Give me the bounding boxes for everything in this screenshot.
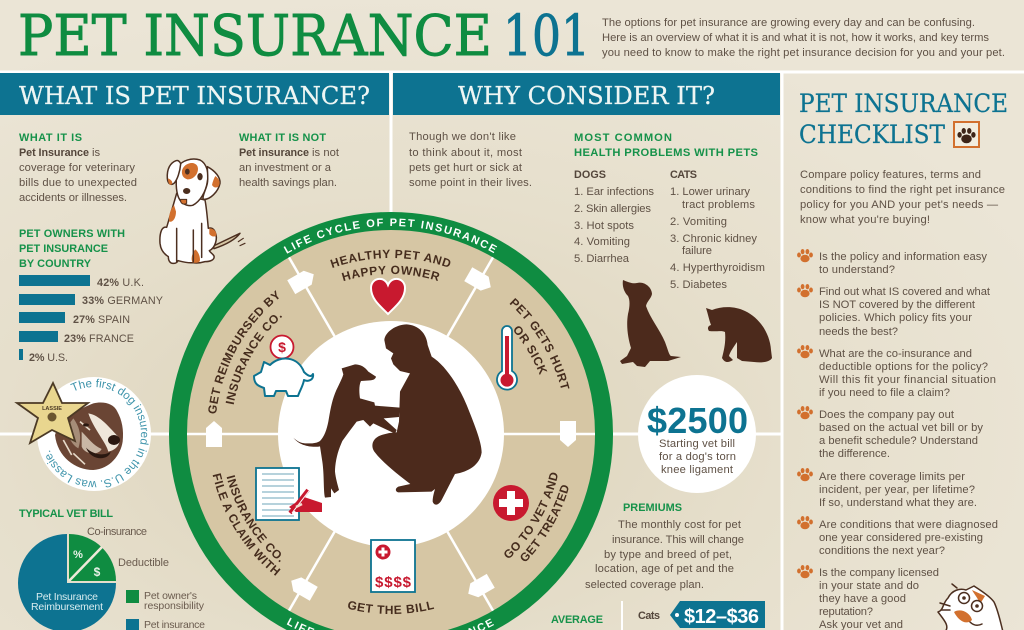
average premium: AVERAGE: [551, 614, 603, 626]
checklist item 6: [797, 516, 998, 557]
checklist item 7: Is the company licensed: [819, 567, 939, 579]
text block: why consider: [409, 131, 532, 189]
icon: bill: $$$$: [375, 574, 412, 591]
text block: what it is not: is not: [312, 147, 340, 159]
header: why consider it: [393, 73, 780, 115]
checklist item 3: Will this fit your financial situation: [819, 374, 996, 386]
checklist item 6: conditions the next year?: [819, 545, 945, 557]
legend: typical vet bill: Pet owner's: [144, 590, 197, 602]
heading: common health problems: [574, 132, 759, 159]
checklist item 3: What are the co-insurance and: [819, 348, 972, 360]
list: cats: 3. Chronic kidney: [670, 233, 757, 245]
intro text: Here is an overview of what it is and what it is not, how it works, and key terms: [602, 32, 989, 44]
callout: lassie: The first dog insured in the U.S. was Lassie.: [46, 378, 149, 488]
text block: premiums: PREMIUMS: [623, 502, 682, 514]
stage: go to vet: GET TREATED: [520, 485, 568, 562]
checklist item 4: Does the company pay out: [819, 409, 955, 421]
list: cats: 1. Lower urinary: [670, 186, 750, 198]
checklist item 6: Are conditions that were diagnosed: [819, 519, 998, 531]
text block: why consider: some point in their lives.: [409, 177, 532, 189]
icon: piggy bank and coin: [254, 336, 313, 396]
checklist item 2: [797, 284, 991, 338]
text block: checklist intro: Compare policy features, terms and: [800, 169, 981, 181]
heading: typical vet bill: TYPICAL VET BILL: [19, 508, 113, 520]
text block: pet owners heading: PET INSURANCE: [19, 243, 108, 255]
stage: get the bill: GET THE BILL: [348, 601, 434, 614]
stage: go to vet: GO TO VET AND: [504, 472, 558, 558]
text block: what it is: accidents or illnesses.: [19, 192, 127, 204]
arrows between stages: [206, 267, 576, 601]
text block: why consider: to think about it, most: [409, 147, 523, 159]
list: cats: 2. Vomiting: [670, 216, 727, 228]
icon: heart: [371, 279, 405, 314]
list: dogs: 1. Ear infections: [574, 186, 654, 198]
icon: paw badge: [954, 122, 979, 147]
checklist item 2: policies. Which policy fits your: [819, 312, 972, 324]
text block: premiums: selected coverage plan.: [585, 579, 704, 591]
text block: what it is: coverage for veterinary: [19, 162, 135, 174]
bar chart: pet owners by country: [19, 275, 163, 364]
stage: healthy pet: HAPPY OWNER: [342, 266, 440, 281]
text block: pet owners heading: BY COUNTRY: [19, 258, 92, 270]
text block: what it is not: [239, 132, 340, 189]
stage: healthy pet: [330, 250, 450, 281]
checklist item 4: the difference.: [819, 448, 890, 460]
text block: what it is not: WHAT IT IS NOT: [239, 132, 326, 144]
icon: bill: [371, 540, 415, 592]
legend: typical vet bill: [126, 590, 205, 630]
checklist item 5: Are there coverage limits per: [819, 471, 965, 483]
callout: vet bill: $2500: [647, 400, 748, 441]
text block: premiums: [585, 502, 744, 591]
list: cats: CATS: [670, 169, 697, 181]
pie chart: typical vet bill: [18, 526, 169, 630]
heading: checklist: [799, 89, 1008, 149]
icon: medical cross: [493, 485, 529, 521]
list: dogs: DOGS: [574, 169, 606, 181]
checklist item 6: one year considered pre-existing: [819, 532, 983, 544]
list: cats: tract problems: [682, 199, 755, 211]
white centre: [278, 321, 504, 547]
icon: cartoon cat with glasses: [938, 584, 1003, 630]
icon: dog silhouette: [620, 280, 681, 367]
stage: pet gets hurt: OR SICK: [514, 326, 548, 375]
list: cats: 5. Diabetes: [670, 279, 727, 291]
price tag: cats: [670, 601, 765, 628]
checklist item 4: [797, 406, 983, 460]
checklist item 2: IS NOT covered by the different: [819, 299, 976, 311]
callout: vet bill: knee ligament: [661, 464, 734, 476]
text block: premiums: The monthly cost for pet: [618, 519, 742, 531]
intro text: [602, 17, 1005, 59]
text block: premiums: by type and breed of pet,: [604, 549, 732, 561]
header: why consider it: WHY CONSIDER IT?: [458, 82, 715, 110]
checklist item 2: Find out what IS covered and what: [819, 286, 991, 298]
checklist item 4: a benefit schedule? Understand: [819, 435, 978, 447]
checklist item 3: if you need to file a claim?: [819, 387, 950, 399]
text block: checklist intro: know what you're buying!: [800, 214, 930, 226]
checklist item 5: [797, 468, 977, 509]
heading: checklist: PET INSURANCE: [799, 89, 1008, 118]
bar chart: pet owners by country: 2% U.S.: [29, 352, 68, 364]
icon: lassie portrait: [55, 402, 123, 470]
stage: file a claim: INSURANCE CO.: [226, 475, 281, 562]
owner silhouette: [372, 324, 482, 505]
title: PET INSURANCE: [18, 4, 492, 69]
pie chart: typical vet bill: Reimbursement: [31, 601, 103, 613]
callout: vet bill: [638, 375, 756, 493]
stage: healthy pet: HEALTHY PET AND: [330, 250, 450, 268]
bar chart: pet owners by country: 33% GERMANY: [82, 295, 163, 307]
checklist item 7: in your state and do: [819, 580, 919, 592]
list: dogs: 4. Vomiting: [574, 236, 630, 248]
checklist item 5: If so, understand what they are.: [819, 497, 977, 509]
segment dividers: [187, 257, 595, 611]
title: 101: [503, 4, 590, 69]
ring label top: LIFE CYCLE OF PET INSURANCE: [284, 218, 498, 254]
callout: vet bill: Starting vet bill: [659, 438, 735, 450]
checklist item 1: [797, 249, 987, 276]
text block: why consider: Though we don't like: [409, 131, 516, 143]
illustration: owner and dog silhouette: [293, 324, 482, 505]
list: cats: 4. Hyperthyroidism: [670, 262, 765, 274]
checklist item 4: based on the actual vet bill or by: [819, 422, 983, 434]
text block: checklist intro: policy for you AND your pet's needs —: [800, 199, 999, 211]
checklist item 7: reputation?: [819, 606, 873, 618]
pie chart: typical vet bill: Pet Insurance: [36, 591, 98, 603]
pie chart: typical vet bill: Co-insurance: [87, 526, 147, 538]
stage: reimbursed: GET REIMBURSED BY: [208, 290, 279, 414]
checklist item 5: incident, per year, per lifetime?: [819, 484, 975, 496]
stage: reimbursed: INSURANCE CO.: [226, 315, 282, 404]
callout: vet bill: for a dog's torn: [659, 451, 736, 463]
text block: what it is not: an investment or a: [239, 162, 332, 174]
text block: checklist intro: conditions to find the right pet insurance: [800, 184, 1005, 196]
stage: pet gets hurt: PET GETS HURT: [510, 298, 570, 389]
intro text: The options for pet insurance are growing every day and can be confusing.: [602, 17, 975, 29]
text block: pet owners heading: PET OWNERS WITH: [19, 228, 125, 240]
text block: premiums: insurance. This will change: [612, 534, 744, 546]
checklist item 1: Is the policy and information easy: [819, 251, 987, 263]
bar chart: pet owners by country: 42% U.K.: [97, 277, 144, 289]
stage: file a claim: FILE A CLAIM WITH: [212, 473, 280, 576]
icon: thermometer: [497, 326, 517, 390]
heading: common health problems: HEALTH PROBLEMS WITH PETS: [574, 147, 759, 159]
text block: what it is: bills due to unexpected: [19, 177, 137, 189]
text block: checklist intro: [800, 169, 1005, 226]
bar chart: pet owners by country: 23% FRANCE: [64, 333, 134, 345]
checklist item 3: deductible options for the policy?: [819, 361, 988, 373]
checklist item 2: needs the best?: [819, 326, 898, 338]
checklist item 7: [797, 565, 939, 630]
bar chart: pet owners by country: 27% SPAIN: [73, 314, 130, 326]
text block: pet owners heading: [19, 228, 125, 270]
icon: piggy bank and coin: $: [278, 339, 286, 355]
header: what is pet insurance: WHAT IS PET INSURANCE?: [19, 82, 370, 110]
icon: cat silhouette: [706, 307, 772, 362]
checklist item 1: to understand?: [819, 264, 895, 276]
text block: what it is not: health savings plan.: [239, 177, 337, 189]
icon: claim form: [256, 468, 322, 520]
text block: what it is: [19, 132, 137, 204]
pie chart: typical vet bill: %: [73, 549, 83, 561]
legend: typical vet bill: responsibility: [144, 600, 205, 612]
text block: why consider: pets get hurt or sick at: [409, 162, 523, 174]
icon: star: LASSIE: [42, 406, 62, 412]
pie chart: typical vet bill: $: [94, 565, 101, 579]
heading: checklist: CHECKLIST: [799, 120, 945, 149]
list: dogs: 5. Diarrhea: [574, 253, 630, 265]
text block: premiums: location, age of pet and the: [595, 563, 734, 575]
icon: cartoon dog: [160, 159, 245, 263]
list: cats: [670, 169, 765, 291]
list: dogs: [574, 169, 654, 265]
pie chart: typical vet bill: Deductible: [118, 557, 169, 569]
green ring: [178, 221, 604, 630]
average premium: Cats: [638, 610, 660, 622]
list: cats: failure: [682, 245, 712, 257]
dog silhouette: [293, 364, 400, 498]
price tag: cats: $12–$36: [684, 606, 759, 628]
life cycle wheel: [169, 212, 613, 630]
header: what is pet insurance: [0, 73, 389, 115]
list: dogs: 3. Hot spots: [574, 220, 634, 232]
average premium: [551, 601, 765, 630]
heading: common health problems: MOST COMMON: [574, 132, 672, 144]
checklist item 3: [797, 345, 996, 399]
text block: what it is: is: [92, 147, 100, 159]
checklist item 7: they have a good: [819, 593, 906, 605]
text block: what it is not: Pet insurance: [239, 147, 309, 159]
intro text: you need to know to make the right pet insurance decision for you and your pet.: [602, 47, 1005, 59]
text block: what it is: Pet Insurance: [19, 147, 89, 159]
text block: what it is: WHAT IT IS: [19, 132, 82, 144]
list: dogs: 2. Skin allergies: [574, 203, 651, 215]
